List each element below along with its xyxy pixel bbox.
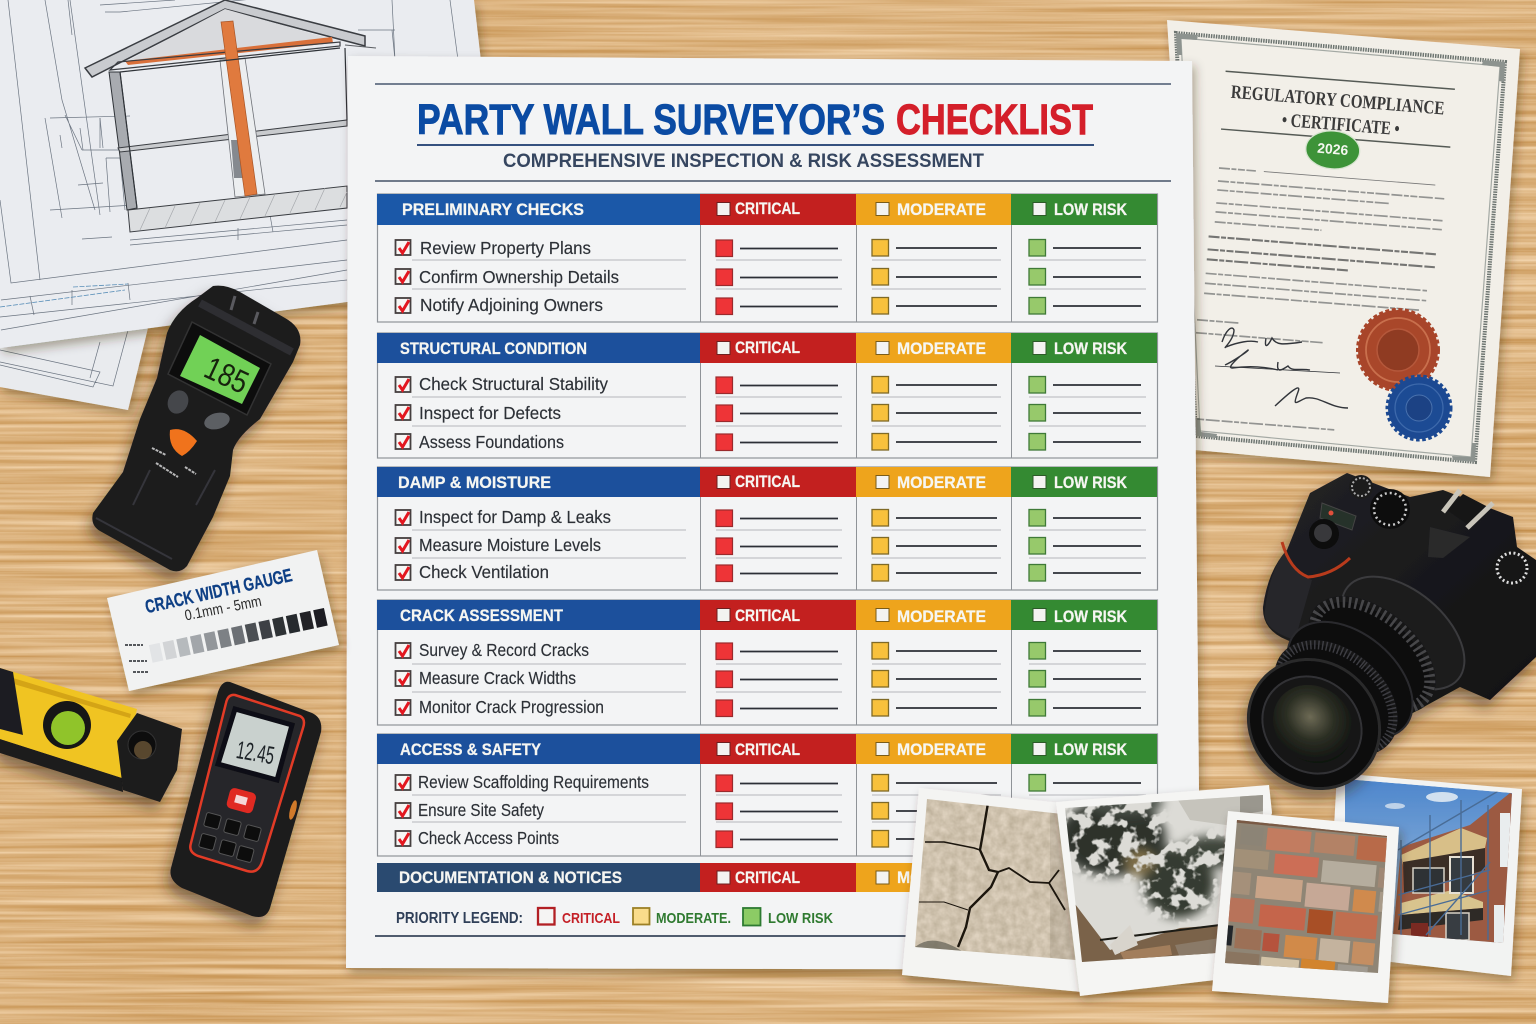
row: survey and record cracks: Survey & Record Cracks bbox=[419, 640, 589, 660]
blueprint drawing frame and dimension lines bbox=[0, 0, 458, 330]
crack width gauge: 0.1mm - 5mm bbox=[183, 593, 263, 624]
priority legend: MODERATE. bbox=[656, 910, 731, 927]
certificate title: REGULATORY COMPLIANCE bbox=[1230, 82, 1445, 119]
header band: STRUCTURAL CONDITION bbox=[400, 339, 587, 358]
row: check structural stability bbox=[396, 374, 1146, 397]
priority legend: CRITICAL bbox=[562, 910, 620, 927]
house roof bbox=[85, 0, 376, 77]
row: inspect for defects: Inspect for Defects bbox=[419, 403, 561, 423]
blue wax seal bbox=[1388, 377, 1450, 439]
meter display bbox=[168, 322, 271, 415]
blueprint: house cross section bbox=[0, 0, 482, 348]
header band: PRELIMINARY CHECKS bbox=[402, 200, 584, 219]
header band: DAMP & MOISTURE bbox=[398, 473, 551, 492]
camera hot shoe and prism bbox=[1428, 490, 1493, 558]
certificate body text lines bbox=[1178, 166, 1445, 437]
header band: MODERATE bbox=[897, 740, 986, 759]
laser meter keypad bbox=[198, 787, 262, 863]
checklist paper bbox=[346, 56, 1200, 970]
spirit level bbox=[0, 668, 182, 802]
photo: cracked wall polaroid bbox=[902, 788, 1082, 992]
row: measure crack widths: Measure Crack Widths bbox=[419, 668, 576, 688]
certificate bbox=[1167, 20, 1520, 477]
camera bbox=[1222, 473, 1536, 815]
row: review property plans bbox=[396, 238, 1146, 260]
camera top controls bbox=[1309, 475, 1532, 590]
row: ensure site safety: Ensure Site Safety bbox=[418, 800, 544, 820]
section: documentation and notices: MODERATE bbox=[897, 868, 986, 887]
moisture meter bbox=[92, 286, 300, 571]
row: review scaffolding requirements: Review Scaffolding Requirements bbox=[418, 772, 649, 792]
photo: mould damaged wall polaroid bbox=[1056, 785, 1272, 996]
header band bbox=[377, 333, 1157, 363]
header band bbox=[377, 600, 1157, 630]
row: review property plans: Review Property Plans bbox=[420, 238, 591, 258]
camera lens bbox=[1222, 555, 1485, 815]
header band: LOW RISK bbox=[1054, 607, 1128, 626]
section: documentation and notices: CRITICAL bbox=[735, 868, 800, 887]
signatures bbox=[1215, 328, 1348, 408]
header band: LOW RISK bbox=[1054, 740, 1128, 759]
section: documentation and notices: DOCUMENTATION & NOTICES bbox=[399, 868, 622, 887]
row: inspect for defects bbox=[396, 403, 1146, 426]
row: survey and record cracks bbox=[396, 640, 1146, 664]
header band bbox=[377, 467, 1157, 497]
header band bbox=[377, 734, 1157, 764]
crack width gauge: CRACK WIDTH GAUGE bbox=[143, 564, 294, 617]
priority legend: LOW RISK bbox=[768, 910, 833, 927]
laser meter display: 12.45 bbox=[234, 736, 277, 770]
row: check access points: Check Access Points bbox=[418, 828, 559, 848]
header band: CRITICAL bbox=[735, 472, 800, 491]
row: confirm ownership details: Confirm Ownership Details bbox=[419, 267, 619, 287]
header band: MODERATE bbox=[897, 339, 986, 358]
row: assess foundations: Assess Foundations bbox=[419, 432, 564, 452]
party wall and floors bbox=[109, 21, 347, 232]
certificate title bbox=[1221, 71, 1455, 147]
row: confirm ownership details bbox=[396, 267, 1146, 289]
row: inspect for damp and leaks: Inspect for Damp & Leaks bbox=[419, 507, 611, 527]
header band: MODERATE bbox=[897, 473, 986, 492]
crack width gauge bbox=[107, 550, 339, 691]
header band: ACCESS & SAFETY bbox=[400, 740, 542, 759]
row: review scaffolding requirements bbox=[396, 772, 1146, 795]
header band: LOW RISK bbox=[1054, 200, 1128, 219]
certificate paper bbox=[1167, 20, 1520, 477]
section: documentation and notices bbox=[377, 863, 1157, 892]
row: notify adjoining owners: Notify Adjoining Owners bbox=[420, 295, 603, 315]
section: access and safety bbox=[377, 734, 1158, 856]
header band: CRITICAL bbox=[735, 338, 800, 357]
header band: MODERATE bbox=[897, 607, 986, 626]
certificate 2026 badge: 2026 bbox=[1317, 140, 1349, 158]
row: notify adjoining owners bbox=[396, 295, 1141, 315]
laser meter display bbox=[218, 709, 292, 780]
lower blueprint sheet bbox=[0, 328, 148, 410]
site photo: scaffolding polaroid bbox=[1330, 773, 1522, 976]
section: damp and moisture bbox=[377, 467, 1158, 590]
priority legend: PRIORITY LEGEND: bbox=[396, 910, 523, 927]
header band: CRITICAL bbox=[735, 199, 800, 218]
certificate 2026 badge bbox=[1304, 129, 1361, 171]
row: ensure site safety bbox=[396, 800, 1146, 822]
laser distance meter bbox=[170, 682, 321, 917]
row: measure moisture levels: Measure Moisture Levels bbox=[419, 535, 601, 555]
level hole bbox=[128, 731, 156, 759]
row: check ventilation: Check Ventilation bbox=[419, 562, 549, 582]
title: CHECKLIST bbox=[896, 96, 1093, 144]
priority legend bbox=[375, 908, 1170, 936]
header band: CRITICAL bbox=[735, 606, 800, 625]
gauge scale swatches bbox=[149, 608, 328, 663]
row: check access points bbox=[396, 828, 1141, 848]
row: check structural stability: Check Structural Stability bbox=[419, 374, 608, 394]
section: structural condition bbox=[377, 333, 1158, 458]
header band: CRITICAL bbox=[735, 740, 800, 759]
row: monitor crack progression bbox=[396, 697, 1141, 717]
certificate title: • CERTIFICATE • bbox=[1281, 110, 1400, 140]
row: measure moisture levels bbox=[396, 535, 1146, 558]
header band: MODERATE bbox=[897, 200, 986, 219]
row: assess foundations bbox=[396, 432, 1141, 452]
row: inspect for damp and leaks bbox=[396, 507, 1146, 530]
certificate border bbox=[1176, 33, 1505, 462]
red wax seal bbox=[1358, 310, 1438, 390]
header band: CRACK ASSESSMENT bbox=[400, 606, 564, 625]
header band bbox=[377, 194, 1157, 225]
row: monitor crack progression: Monitor Crack Progression bbox=[419, 697, 604, 717]
row: check ventilation bbox=[396, 562, 1141, 582]
photo: damaged brickwork polaroid bbox=[1206, 810, 1404, 1005]
section: crack assessment bbox=[377, 600, 1158, 725]
header band: LOW RISK bbox=[1054, 473, 1128, 492]
meter display: 185 bbox=[199, 349, 254, 401]
header band: LOW RISK bbox=[1054, 339, 1128, 358]
level vial bbox=[43, 701, 91, 749]
meter buttons bbox=[152, 387, 232, 477]
title bbox=[375, 84, 1171, 181]
title: PARTY WALL SURVEYOR’S bbox=[417, 96, 885, 144]
row: measure crack widths bbox=[396, 668, 1146, 692]
section: preliminary checks bbox=[377, 194, 1158, 322]
title: COMPREHENSIVE INSPECTION & RISK ASSESSMENT bbox=[503, 150, 984, 172]
